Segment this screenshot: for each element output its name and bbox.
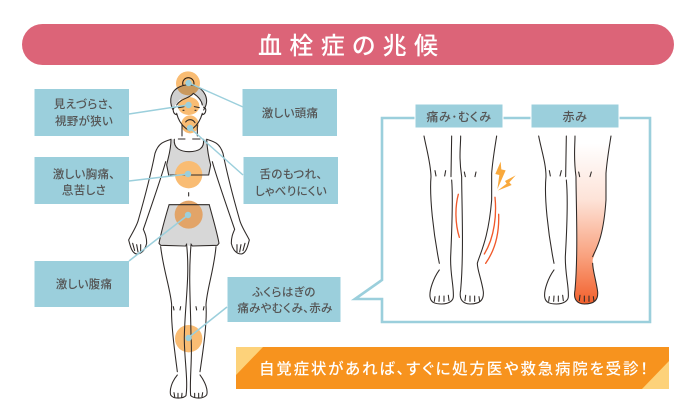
label: calf: [228, 277, 340, 322]
head: [171, 71, 207, 136]
vision spot: [178, 97, 199, 115]
icon: lightning: [495, 162, 516, 191]
swelling marks: [456, 194, 499, 263]
label: vision: [34, 89, 129, 136]
panel heading: pain and swelling: 痛み･むくみ: [426, 109, 492, 124]
label: vision: 視野が狭い: [55, 114, 113, 128]
connector lines: [129, 80, 243, 341]
panel: leg comparison frame: [355, 118, 650, 322]
label: chest pain: 激しい胸痛、: [53, 167, 115, 181]
legs: [161, 245, 216, 398]
calf spot: [175, 325, 202, 352]
label: calf: 痛みやむくみ、赤み: [237, 301, 333, 315]
title bar: [22, 24, 674, 65]
legs: pain and swelling: [424, 136, 516, 304]
legs: redness: [539, 136, 611, 304]
label: headache: [242, 89, 337, 136]
title bar: 血栓症の兆候: [258, 33, 438, 60]
call-to-action banner: [236, 347, 669, 389]
figure: woman's body with symptom spots: [129, 71, 249, 398]
panel heading: pain and swelling: [415, 104, 503, 128]
label: chest pain: 息苦しさ: [62, 183, 106, 197]
label: vision: 見えづらさ、: [54, 97, 114, 111]
headache spot: [176, 71, 200, 95]
label: speech: [244, 157, 338, 204]
torso and limbs: [129, 139, 249, 254]
label: speech: 舌のもつれ、: [260, 167, 322, 181]
chest pain spot: [175, 161, 202, 188]
label: headache: 激しい頭痛: [262, 106, 318, 120]
call-to-action banner: 自覚症状があれば、すぐに処方医や救急病院を受診！: [259, 359, 648, 378]
label: speech: しゃべりにくい: [255, 185, 327, 198]
label: abdominal pain: 激しい腹痛: [56, 277, 112, 291]
label: abdominal pain: [34, 261, 129, 307]
mouth spot: [181, 115, 199, 133]
abdominal pain spot: [175, 201, 203, 229]
label: chest pain: [34, 157, 129, 204]
label: calf: ふくらはぎの: [252, 285, 316, 299]
panel heading: redness: [531, 104, 619, 128]
panel heading: redness: 赤み: [563, 110, 587, 124]
